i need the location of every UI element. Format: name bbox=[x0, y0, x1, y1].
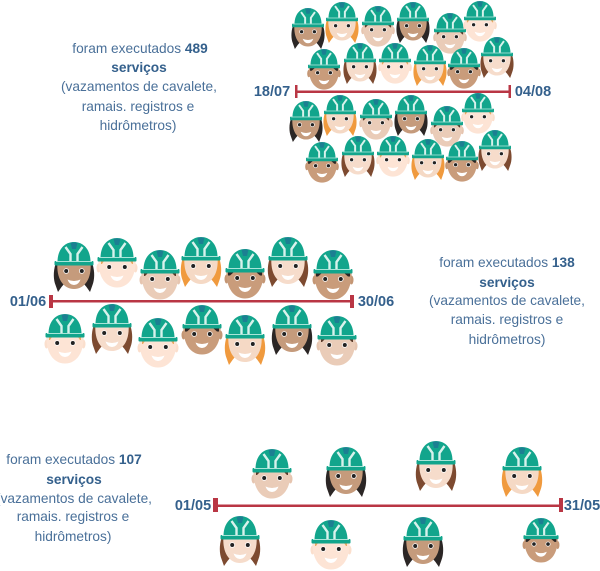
text block: 107 services: hidrômetros) bbox=[35, 529, 111, 544]
text block: 489 services: ramais. registros e bbox=[82, 99, 194, 114]
workers group: above second timeline bbox=[54, 237, 354, 300]
text block: 138 services: serviços bbox=[479, 275, 535, 290]
text block: 107 services: (vazamentos de cavalete, bbox=[0, 491, 152, 506]
text block: 489 services bbox=[61, 41, 217, 133]
timeline: 18/07 to 04/08: 04/08 bbox=[515, 84, 551, 100]
timeline: 18/07 to 04/08 bbox=[254, 84, 551, 100]
workers group: below first timeline bbox=[289, 93, 512, 183]
text block: 489 services: hidrômetros) bbox=[100, 118, 176, 133]
text block: 138 services bbox=[429, 255, 585, 347]
text block: 138 services: foram executados 138 bbox=[439, 255, 575, 270]
workers group: above first timeline bbox=[291, 1, 514, 90]
text block: 489 services: foram executados 489 bbox=[72, 41, 208, 56]
text block: 138 services: (vazamentos de cavalete, bbox=[429, 293, 585, 308]
timeline: 01/05 to 31/05 bbox=[175, 498, 600, 514]
text block: 107 services: foram executados 107 bbox=[6, 452, 142, 467]
workers group: below third timeline bbox=[220, 516, 559, 570]
timeline: 01/05 to 31/05: 31/05 bbox=[564, 498, 600, 514]
timeline: 01/06 to 30/06 bbox=[10, 294, 394, 310]
workers group: above third timeline bbox=[252, 441, 542, 498]
text block: 489 services: serviços bbox=[111, 60, 167, 75]
timeline: 01/05 to 31/05: 01/05 bbox=[175, 498, 211, 514]
workers group: below second timeline bbox=[44, 304, 358, 368]
text block: 107 services: serviços bbox=[46, 472, 102, 487]
text block: 489 services: (vazamentos de cavalete, bbox=[61, 79, 217, 94]
timeline: 18/07 to 04/08: 18/07 bbox=[254, 84, 290, 100]
text block: 138 services: hidrômetros) bbox=[469, 332, 545, 347]
timeline: 01/06 to 30/06: 30/06 bbox=[358, 294, 394, 310]
text block: 138 services: ramais. registros e bbox=[451, 312, 563, 327]
timeline: 01/06 to 30/06: 01/06 bbox=[10, 294, 46, 310]
text block: 107 services: ramais. registros e bbox=[17, 509, 129, 524]
text block: 107 services bbox=[0, 452, 152, 544]
